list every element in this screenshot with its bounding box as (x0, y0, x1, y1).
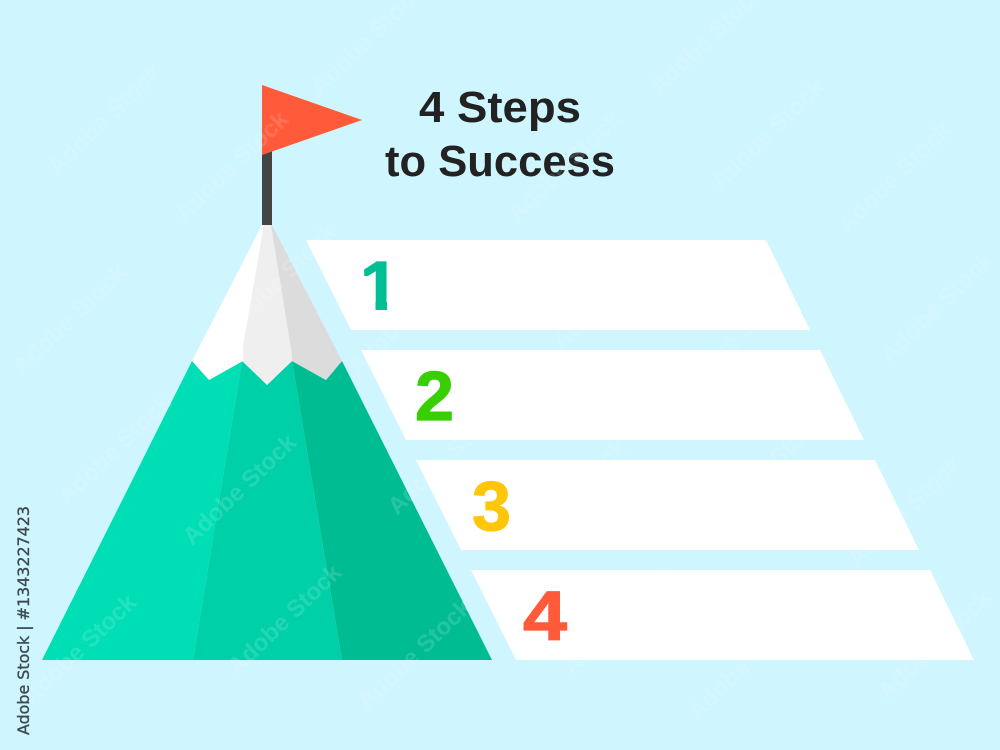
watermarks: Adobe Stock (8, 258, 132, 380)
watermarks: Adobe Stock (706, 73, 830, 195)
watermarks: Adobe Stock (706, 406, 830, 528)
band 2 (361, 350, 864, 440)
watermarks: Adobe Stock (508, 433, 632, 555)
number 4: 4 (523, 577, 567, 655)
watermarks: Adobe Stock (218, 218, 342, 340)
watermarks: Adobe Stock (875, 246, 999, 368)
title (385, 83, 615, 186)
watermarks: Adobe Stock (503, 105, 627, 227)
icon: flag (262, 85, 362, 225)
step numbers (360, 247, 567, 655)
watermarks: Adobe Stock (53, 388, 177, 510)
watermarks: Adobe Stock (178, 428, 302, 550)
watermarks: Adobe Stock (170, 105, 294, 227)
title line 2: to Success (385, 137, 615, 186)
title line 1: 4 Steps (419, 83, 581, 132)
step bands (306, 240, 974, 660)
watermarks: Adobe Stock (383, 398, 507, 520)
watermarks: Adobe Stock (548, 233, 672, 355)
watermarks: Adobe Stock (843, 450, 967, 572)
number 3: 3 (472, 467, 511, 545)
snow cap middle (243, 225, 292, 385)
watermarks: Adobe Stock (353, 593, 477, 715)
icon: mountain (42, 225, 492, 660)
mountain middle facet (193, 361, 342, 660)
number 2: 2 (415, 357, 454, 435)
snow cap left (192, 225, 264, 380)
mountain right facet (292, 361, 492, 660)
watermarks: Adobe Stock (343, 258, 467, 380)
snow cap right (271, 225, 342, 380)
stock id label: Adobe Stock | #1343227423 (14, 506, 33, 735)
flag pennant (262, 85, 362, 155)
watermarks: Adobe Stock (873, 583, 997, 705)
flag pole (262, 150, 272, 225)
watermarks: Adobe Stock (558, 558, 682, 680)
watermarks: Adobe Stock (223, 558, 347, 680)
number 1: 1 (360, 247, 399, 325)
watermarks: Adobe Stock (673, 278, 797, 400)
watermarks: Adobe Stock (833, 116, 957, 238)
band 4 (471, 570, 974, 660)
watermarks: Adobe Stock (18, 588, 142, 710)
watermarks: Adobe Stock (43, 58, 167, 180)
mountain left facet (42, 361, 242, 660)
band 1 (306, 240, 810, 330)
watermarks: Adobe Stock (683, 603, 807, 725)
band 3 (416, 460, 919, 550)
